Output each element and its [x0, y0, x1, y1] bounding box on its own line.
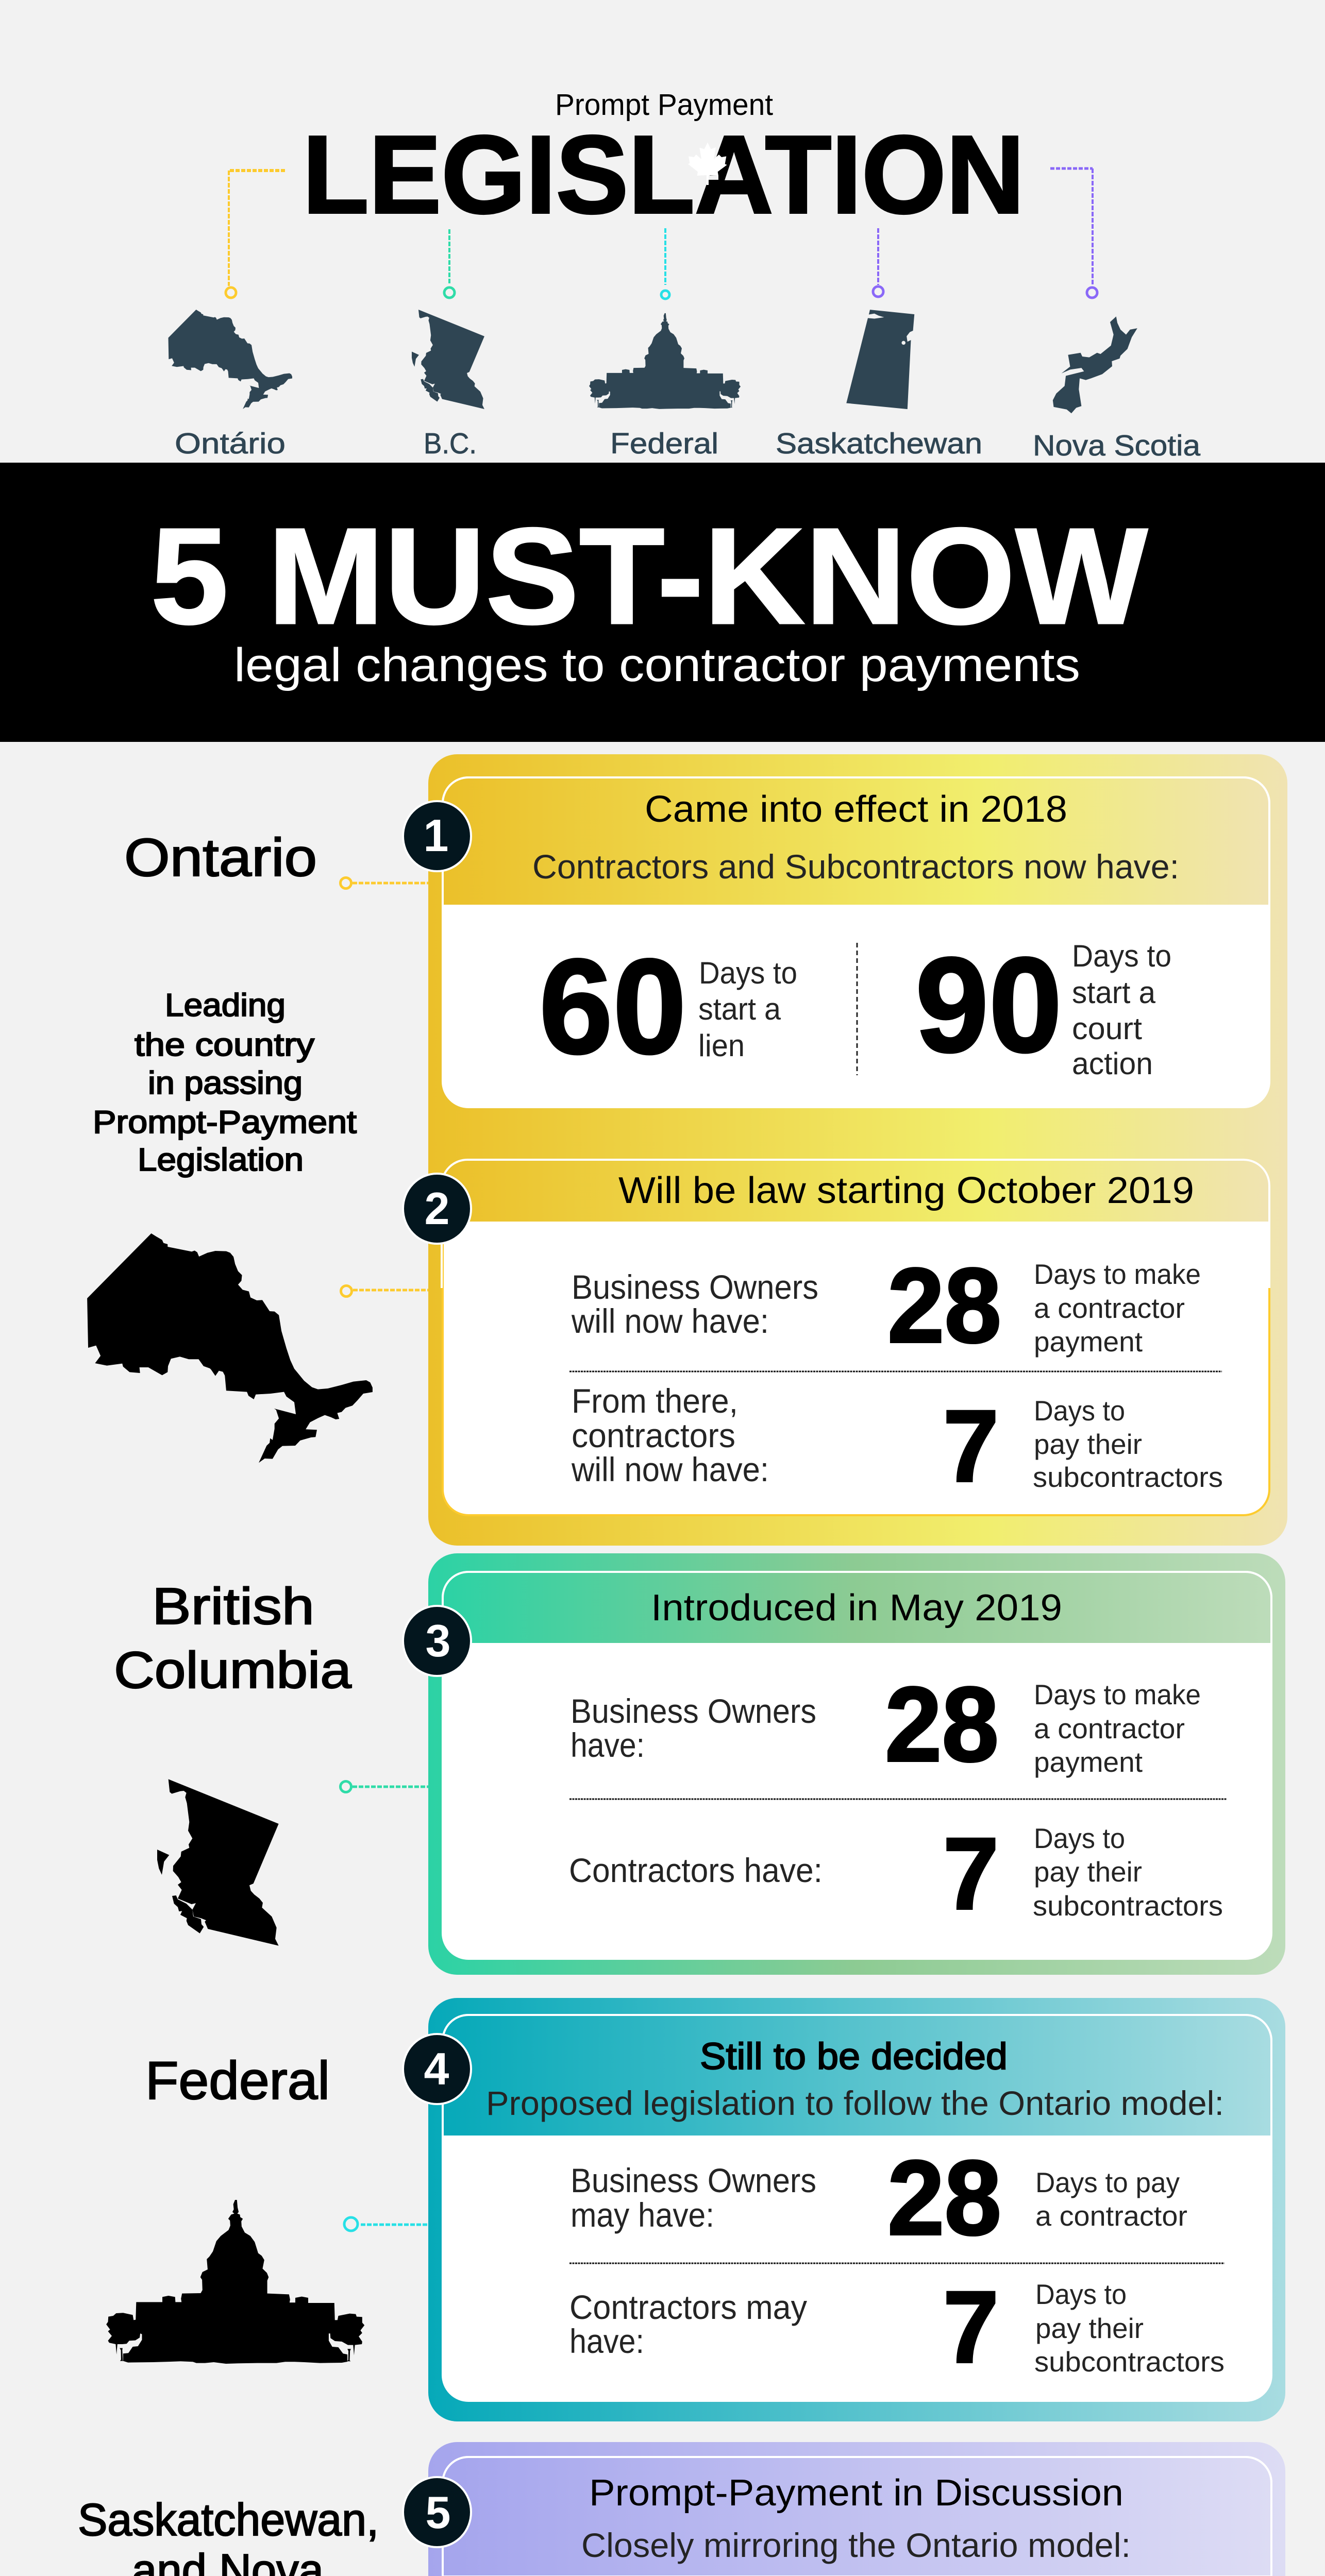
row: business owners 28 days: 28 [885, 1665, 999, 1784]
row: contractors 7 days: pay their [1034, 1428, 1142, 1460]
card 3 heading: Introduced in May 2019 [651, 1587, 1062, 1629]
row: business owners 28 days [571, 1665, 1201, 1784]
row: contractors 7 days: 7 [943, 1817, 999, 1930]
panel: Saskatchewan and Nova Scotia [403, 2442, 1285, 2576]
row: contractors 7 days: have: [569, 2322, 644, 2360]
badge 1 [403, 801, 471, 871]
icon: B.C. silhouette [157, 1779, 279, 1946]
panel: British Columbia [403, 1553, 1285, 1975]
region labels: Nova Scotia [1033, 429, 1200, 462]
region labels [175, 427, 1200, 462]
row: contractors 7 days: will now have: [571, 1450, 769, 1488]
card 2 heading: Will be law starting October 2019 [618, 1170, 1194, 1211]
row: contractors 7 days: Days to [1035, 2278, 1127, 2310]
row: contractors 7 days: pay their [1034, 1856, 1142, 1888]
row: contractors 7 days: Days to [1034, 1822, 1125, 1854]
row: business owners 28 days: a contractor [1035, 2200, 1187, 2232]
badge 5 [403, 2477, 471, 2547]
stat: 90 days to start a court action: start a [1072, 975, 1156, 1010]
row: business owners 28 days: Business Owners [572, 1268, 818, 1306]
row: business owners 28 days: a contractor [1034, 1292, 1185, 1324]
row: business owners 28 days: 28 [887, 2139, 1001, 2257]
row: contractors 7 days: 7 [943, 1389, 999, 1503]
row: business owners 28 days: payment [1034, 1326, 1143, 1358]
panel: Federal [403, 1998, 1285, 2421]
stat: 60 days to start a lien: lien [698, 1028, 745, 1063]
row: business owners 28 days: a contractor [1034, 1713, 1185, 1744]
title: LEGISLATION: LEGISLATION [303, 112, 1025, 236]
badge 2: 2 [425, 1183, 449, 1234]
header: Prompt Payment Legislation [303, 88, 1025, 236]
row: contractors 7 days: subcontractors [1033, 1461, 1223, 1493]
region labels: Saskatchewan [776, 427, 982, 460]
row: contractors 7 days: Contractors may [569, 2288, 807, 2326]
card 4: Still to be decided [443, 2015, 1271, 2401]
connector: card 2 [341, 1286, 428, 1296]
stat: 90 days to start a court action: action [1072, 1046, 1153, 1081]
row: contractors 7 days: From there, [572, 1382, 738, 1420]
icon: Federal building silhouette [106, 2200, 364, 2364]
card 5: Prompt-Payment in Discussion [443, 2457, 1271, 2576]
stat: 60 days to start a lien [539, 931, 797, 1082]
row: business owners 28 days: have: [571, 1726, 645, 1764]
card 4 heading: Still to be decided [700, 2036, 1008, 2077]
banner: 5 must-know [0, 463, 1325, 742]
row: contractors 7 days [569, 2270, 1225, 2384]
card 5 subheading: Closely mirroring the Ontario model: [581, 2526, 1131, 2564]
region labels: B.C. [424, 427, 477, 460]
stat: 90 days to start a court action: 90 [915, 929, 1062, 1080]
card 2: Will be law starting October 2019 [442, 1160, 1269, 1515]
icon: Federal parliament building [589, 313, 741, 409]
text: Leading the country: Prompt-Payment [93, 1105, 357, 1140]
section heading: British Columbia: Columbia [114, 1641, 351, 1699]
text: Leading the country: Legislation [138, 1142, 304, 1178]
section heading: British Columbia [114, 1578, 351, 1699]
badge 4: 4 [424, 2043, 449, 2094]
row: business owners 28 days: will now have: [571, 1302, 769, 1340]
row: business owners 28 days: Days to make [1034, 1258, 1201, 1290]
row: contractors 7 days: subcontractors [1034, 2346, 1225, 2378]
icon: Ontario map [169, 310, 292, 409]
section heading: Ontario: Ontario [124, 828, 317, 888]
row: contractors 7 days: subcontractors [1033, 1890, 1223, 1922]
connector: card 1 [340, 878, 428, 888]
region labels: Ontário [175, 427, 286, 460]
row: business owners 28 days: Days to make [1034, 1679, 1201, 1710]
stat: 90 days to start a court action [915, 929, 1171, 1081]
subtitle: Prompt Payment: Prompt Payment [555, 88, 773, 122]
card 3: Introduced in May 2019 [443, 1572, 1271, 1959]
section heading: British Columbia: British [152, 1578, 314, 1635]
text: Leading the country [93, 988, 357, 1178]
row: contractors 7 days: Contractors have: [569, 1851, 823, 1889]
card 1: Came into effect in 2018 [443, 777, 1269, 1107]
badge 1: 1 [424, 810, 448, 861]
row: business owners 28 days: Business Owners [571, 2161, 816, 2199]
connector: B.C. [444, 229, 455, 298]
connector: card 4 [344, 2217, 428, 2231]
section heading: Saskatchewan and Nova Scotia: Saskatchewan, [78, 2494, 379, 2545]
region labels: Federal [610, 427, 718, 460]
card 1 subheading: Contractors and Subcontractors now have: [532, 848, 1179, 886]
connector: Ontario [226, 171, 285, 298]
connector: Nova Scotia [1050, 168, 1097, 298]
stat: 90 days to start a court action: Days to [1072, 939, 1171, 973]
text: Leading the country: the country [135, 1027, 314, 1063]
badge 5: 5 [426, 2487, 450, 2538]
text: Leading the country: Leading [165, 988, 286, 1023]
panel: Ontario [403, 754, 1287, 1546]
connector: card 3 [340, 1782, 428, 1792]
section heading: Federal: Federal [145, 2051, 330, 2111]
row: business owners 28 days: payment [1034, 1746, 1143, 1778]
row: business owners 28 days: Business Owners [571, 1692, 816, 1730]
stat: 60 days to start a lien: 60 [539, 931, 686, 1082]
icon: Nova Scotia map [1053, 316, 1137, 413]
badge 3 [403, 1606, 471, 1676]
text: Leading the country: in passing [148, 1065, 303, 1101]
connector: Federal [661, 228, 669, 299]
stat: 60 days to start a lien: Days to [699, 956, 797, 990]
row: contractors 7 days [569, 1817, 1223, 1930]
section heading: Saskatchewan and Nova Scotia [78, 2494, 379, 2576]
card 1 heading: Came into effect in 2018 [645, 789, 1067, 830]
row: business owners 28 days: may have: [571, 2196, 714, 2234]
badge 2 [403, 1174, 471, 1244]
banner subheading: legal changes to contractor payments [234, 639, 1080, 691]
row: contractors 7 days: 7 [943, 2270, 999, 2384]
icon: Saskatchewan map [846, 310, 914, 409]
banner heading: 5 MUST-KNOW [150, 500, 1149, 653]
row: business owners 28 days [571, 1246, 1201, 1365]
row: business owners 28 days: 28 [887, 1246, 1001, 1365]
icon: maple leaf [688, 143, 727, 185]
badge 3: 3 [426, 1615, 450, 1666]
card 4 subheading: Proposed legislation to follow the Ontario model: [486, 2084, 1224, 2122]
row: contractors 7 days [571, 1382, 1223, 1503]
row: contractors 7 days: pay their [1035, 2312, 1144, 2344]
stat: 60 days to start a lien: start a [698, 992, 781, 1026]
stat: 90 days to start a court action: court [1072, 1011, 1142, 1046]
card 5 heading: Prompt-Payment in Discussion [589, 2472, 1123, 2514]
row: contractors 7 days: contractors [572, 1416, 735, 1454]
icon: Ontario silhouette [87, 1233, 373, 1463]
row: business owners 28 days [571, 2139, 1187, 2257]
row: business owners 28 days: Days to pay [1035, 2166, 1180, 2198]
badge 4 [403, 2034, 471, 2104]
icon: B.C. map [412, 310, 484, 409]
row: contractors 7 days: Days to [1034, 1395, 1125, 1427]
connector: Saskatchewan [873, 228, 883, 297]
